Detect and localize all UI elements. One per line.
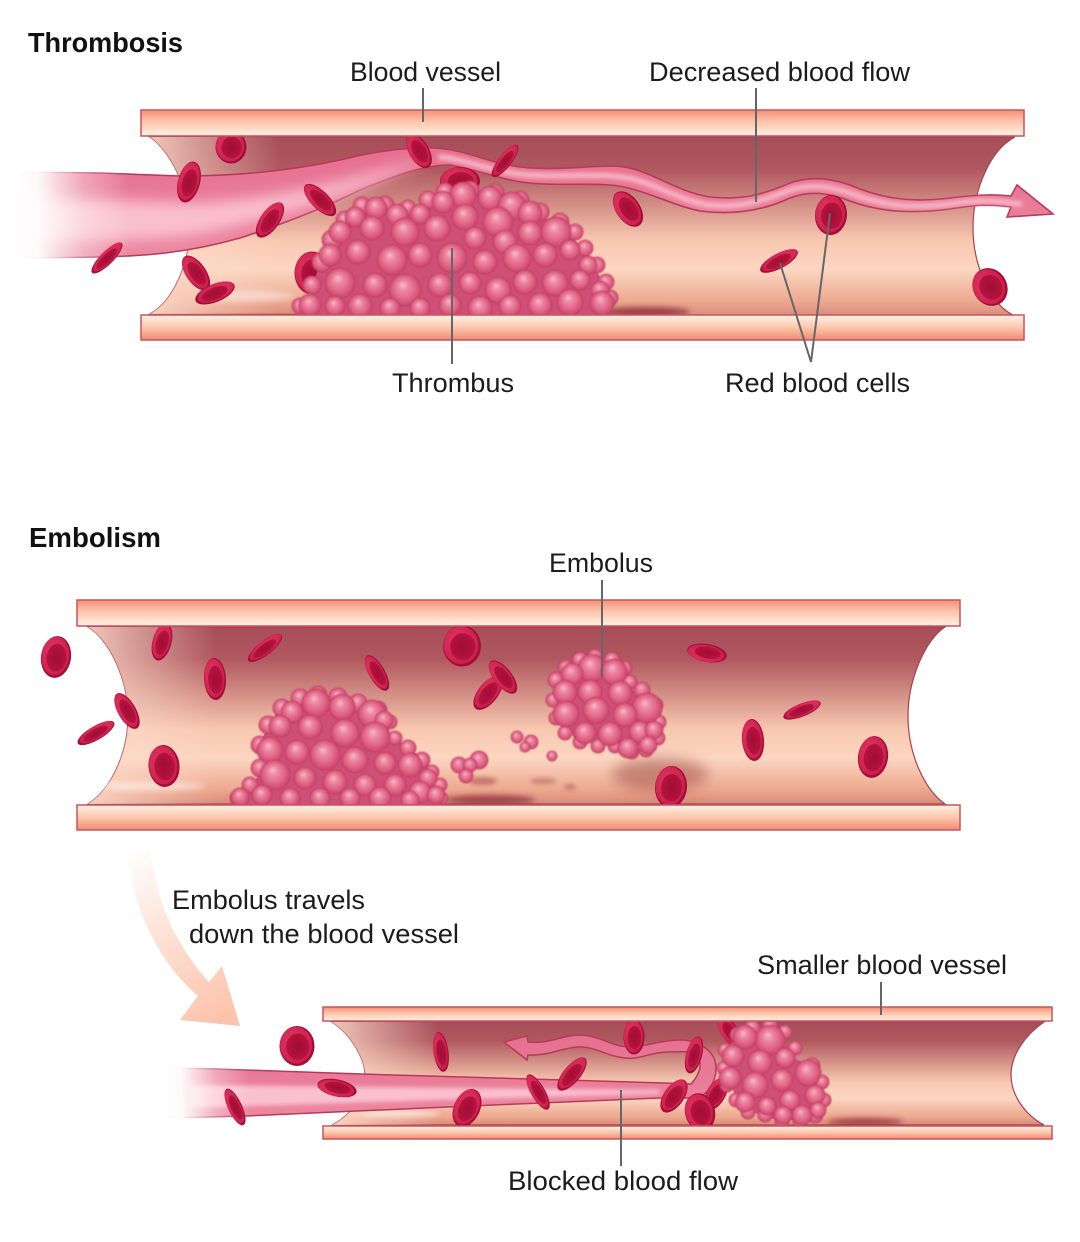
- panel: embolism: [29, 522, 1052, 1196]
- vessel wall: top: [323, 1007, 1052, 1021]
- small clot fragments: [451, 731, 557, 783]
- label: Decreased blood flow: Decreased blood flow: [649, 57, 910, 87]
- smaller blood vessel lumen: [332, 1022, 1044, 1126]
- label: Embolus: Embolus: [549, 548, 653, 578]
- label: Blood vessel: Blood vessel: [350, 57, 501, 87]
- label: Blocked blood flow: Blocked blood flow: [508, 1166, 739, 1196]
- decreased blood flow stream and arrow: [15, 148, 1053, 263]
- embolus blocking smaller vessel: [717, 1019, 831, 1128]
- large blood vessel lumen: [88, 627, 945, 805]
- caption: Embolus travels down the blood vessel: down the blood vessel: [189, 919, 459, 949]
- label: Smaller blood vessel: Smaller blood vessel: [757, 950, 1007, 980]
- vessel wall: bottom: [323, 1126, 1052, 1139]
- embolus clot: [546, 649, 666, 759]
- blood vessel lumen: [150, 137, 1015, 317]
- label: Embolus: [549, 548, 653, 677]
- vessel wall: bottom: [77, 805, 960, 830]
- vessel wall: bottom: [141, 315, 1024, 340]
- thrombus clot: [292, 181, 618, 320]
- thrombus clot: [230, 686, 448, 809]
- vessel wall: top: [77, 600, 960, 626]
- panel: thrombosis: [15, 27, 1053, 398]
- red blood cells: [220, 1012, 747, 1134]
- label: Red blood cells: Red blood cells: [725, 368, 910, 398]
- caption: Embolus travels down the blood vessel: Embolus travels: [172, 885, 365, 915]
- red blood cells: [88, 130, 1014, 312]
- blocked blood flow stream: [165, 1035, 716, 1124]
- label: Red blood cells: [725, 213, 910, 398]
- arrow: embolus travels: [126, 850, 240, 1026]
- red blood cells: [38, 621, 891, 809]
- heading: Embolism: Embolism: [29, 522, 161, 553]
- heading: Thrombosis: Thrombosis: [28, 27, 183, 58]
- label: Thrombus: Thrombus: [392, 368, 514, 398]
- caption: Embolus travels down the blood vessel: [172, 885, 459, 949]
- vessel wall: top: [141, 110, 1024, 136]
